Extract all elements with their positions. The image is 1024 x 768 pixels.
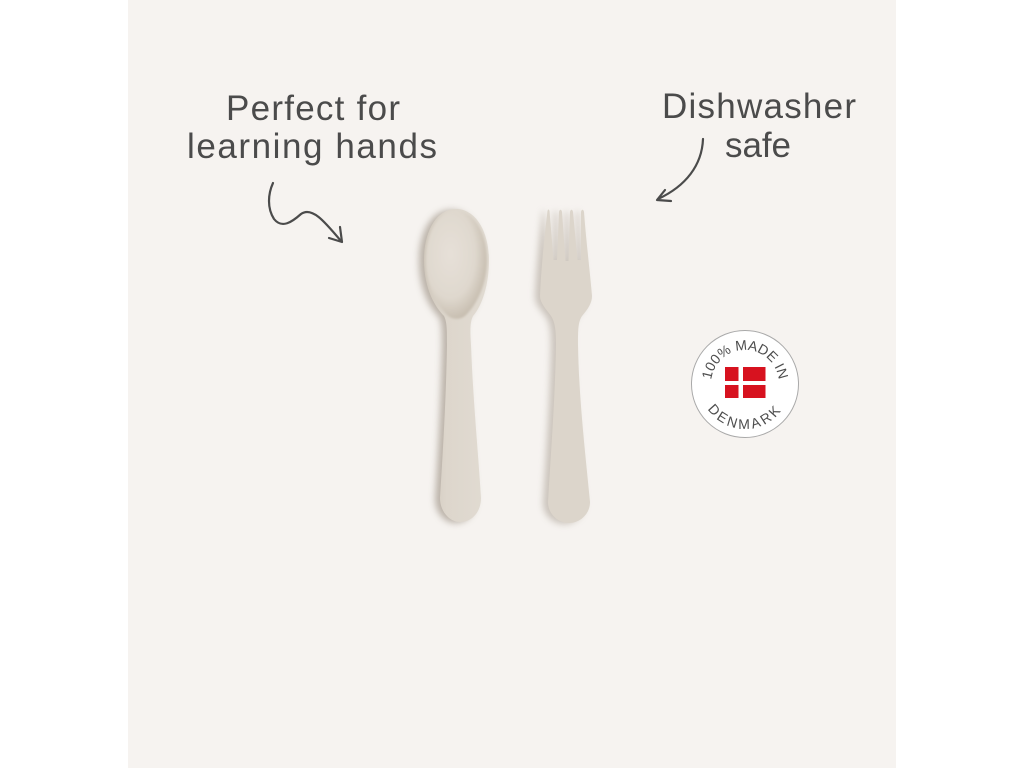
- panel: product background: [128, 0, 896, 768]
- arrow: points to spoon: [269, 183, 342, 242]
- badge text: bottom arc: DENMARK: [708, 404, 781, 429]
- spoon bowl: [426, 211, 487, 319]
- heading: perfect for learning hands: Perfect for: [226, 89, 400, 128]
- heading: dishwasher safe: safe: [725, 126, 791, 165]
- badge: 100% made in Denmark: [691, 330, 799, 438]
- icon: Danish flag: [725, 367, 766, 398]
- arrow: points to fork: [657, 139, 703, 201]
- spoon: [419, 209, 489, 523]
- heading: dishwasher safe: [662, 87, 856, 165]
- heading: perfect for learning hands: learning hands: [187, 127, 437, 166]
- heading: dishwasher safe: Dishwasher: [662, 87, 856, 126]
- badge text: top arc: 100% MADE IN: [702, 340, 788, 379]
- fork: [535, 210, 592, 524]
- heading: perfect for learning hands: [187, 89, 437, 166]
